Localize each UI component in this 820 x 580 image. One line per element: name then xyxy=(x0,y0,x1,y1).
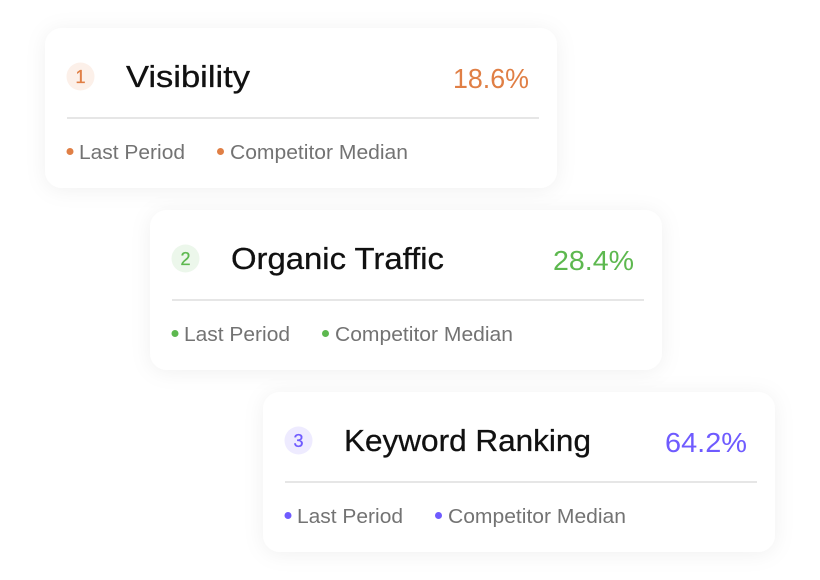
legend: competitor median: Competitor Median xyxy=(230,142,408,164)
panel: keyword ranking card xyxy=(263,392,775,552)
legend: competitor median: Competitor Median xyxy=(448,506,626,528)
icon: number badge 1 xyxy=(66,62,94,90)
legend: last period: Last Period xyxy=(297,506,403,528)
heading: Visibility: Visibility xyxy=(126,59,251,94)
metric: 28.4%: 28.4% xyxy=(553,245,634,276)
legend: competitor median: Competitor Median xyxy=(335,324,513,346)
heading: Keyword Ranking: Keyword Ranking xyxy=(344,423,591,458)
icon: number badge 3: 3 xyxy=(293,431,304,451)
heading: Organic Traffic: Organic Traffic xyxy=(231,241,444,276)
metric: 64.2%: 64.2% xyxy=(665,427,747,458)
panel: organic traffic card xyxy=(150,210,662,370)
metric: 18.6%: 18.6% xyxy=(453,63,529,94)
icon: number badge 2 xyxy=(172,244,200,272)
legend: last period: Last Period xyxy=(184,324,290,346)
icon: number badge 3 xyxy=(284,426,312,454)
icon: number badge 1: 1 xyxy=(75,67,86,87)
icon: number badge 2: 2 xyxy=(180,249,191,269)
legend: last period: Last Period xyxy=(79,142,185,164)
panel: visibility card xyxy=(45,28,557,188)
